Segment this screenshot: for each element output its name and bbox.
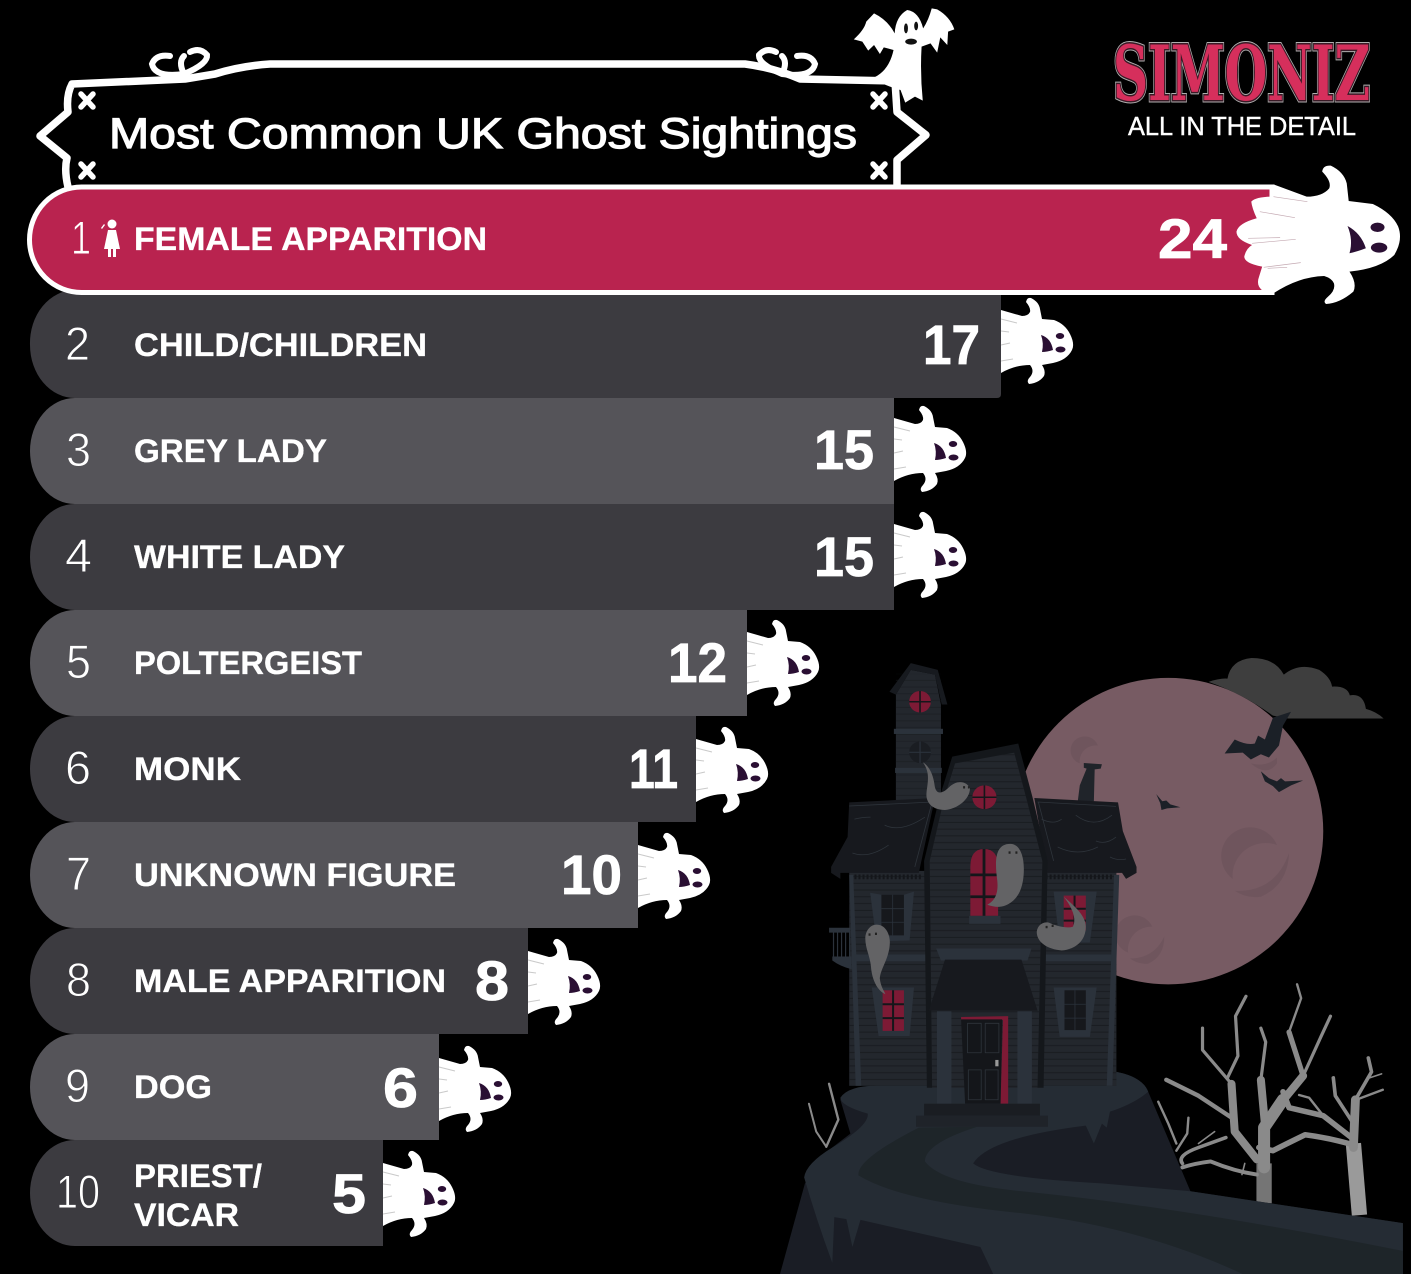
bar 10: priest/vicar: PRIEST/ — [134, 1158, 262, 1194]
bar 1: female apparition — [29, 166, 1400, 304]
cloud — [1209, 658, 1384, 718]
bar 4: white lady: WHITE LADY — [134, 539, 345, 575]
bar 6: monk — [30, 716, 768, 822]
bar 7: unknown figure: 10 — [561, 843, 622, 906]
roofs — [831, 798, 1137, 879]
porch steps — [916, 1104, 1048, 1127]
bar 2: child/children: CHILD/CHILDREN — [134, 327, 427, 363]
bar 3: grey lady: 15 — [814, 418, 874, 481]
red round window — [972, 785, 996, 809]
bar 3: grey lady — [30, 398, 966, 504]
bar 8: male apparition: 8 — [475, 949, 509, 1012]
bar 4: white lady: 15 — [814, 525, 874, 588]
house — [829, 663, 1137, 1104]
house ghosts — [865, 762, 1086, 994]
bar 10: priest/vicar: 5 — [332, 1162, 366, 1225]
icon: large ghost — [1236, 166, 1400, 304]
bar 10: priest/vicar: 10 — [56, 1165, 100, 1218]
chimney — [1078, 763, 1102, 801]
left scroll ornament — [152, 50, 207, 75]
hill — [780, 1071, 1403, 1274]
bar 6: monk: 11 — [629, 737, 678, 800]
illustration: haunted house scene — [780, 658, 1403, 1274]
logo: Simoniz: ALL IN THE DETAIL — [1128, 111, 1356, 141]
bar 3: grey lady: 3 — [66, 423, 91, 476]
bar 7: unknown figure — [30, 822, 710, 928]
label: FEMALE APPARITION — [134, 221, 487, 257]
bar 9: dog: DOG — [134, 1069, 212, 1105]
corner crosses — [81, 94, 885, 177]
bar 5: poltergeist: 5 — [66, 635, 91, 688]
tower — [889, 663, 947, 801]
bar 5: poltergeist: 12 — [668, 631, 727, 694]
icon: female figure — [101, 220, 120, 257]
bar 9: dog: 9 — [65, 1059, 90, 1112]
arched window — [969, 849, 1001, 924]
bar 10: priest/vicar — [30, 1140, 455, 1246]
bar 6: monk: 6 — [65, 741, 91, 794]
bar 10: priest/vicar: VICAR — [134, 1197, 239, 1233]
bar 7: unknown figure: 7 — [66, 847, 91, 900]
bar 6: monk: MONK — [134, 751, 241, 787]
moon — [1013, 678, 1323, 984]
bar 8: male apparition: 8 — [66, 953, 91, 1006]
rank number: 1 — [71, 211, 91, 264]
bar 2: child/children: 2 — [65, 317, 90, 370]
value: 24 — [1158, 207, 1227, 270]
bar 4: white lady — [30, 504, 966, 610]
bar 2: child/children: 17 — [923, 313, 980, 376]
bar 9: dog: 6 — [383, 1056, 418, 1119]
bar 5: poltergeist: POLTERGEIST — [134, 645, 362, 681]
side windows — [870, 892, 1097, 1037]
bar 5: poltergeist — [30, 610, 819, 716]
balcony — [829, 928, 852, 969]
bar 7: unknown figure: UNKNOWN FIGURE — [134, 857, 456, 893]
right scroll ornament — [759, 50, 815, 75]
icon: winged ghost on frame — [854, 8, 954, 103]
bats — [1156, 712, 1303, 810]
trees — [809, 984, 1383, 1215]
bar 4: white lady: 4 — [65, 529, 92, 582]
bar 2: child/children — [30, 290, 1073, 398]
bar 9: dog — [30, 1034, 511, 1140]
porch — [929, 948, 1038, 1104]
bar 8: male apparition: MALE APPARITION — [134, 963, 446, 999]
central gable — [915, 744, 1054, 1088]
title frame — [40, 50, 926, 187]
bar 8: male apparition — [30, 928, 600, 1034]
bar 3: grey lady: GREY LADY — [134, 433, 327, 469]
wings — [849, 871, 1119, 1086]
title: Most Common UK Ghost Sightings — [109, 110, 857, 158]
